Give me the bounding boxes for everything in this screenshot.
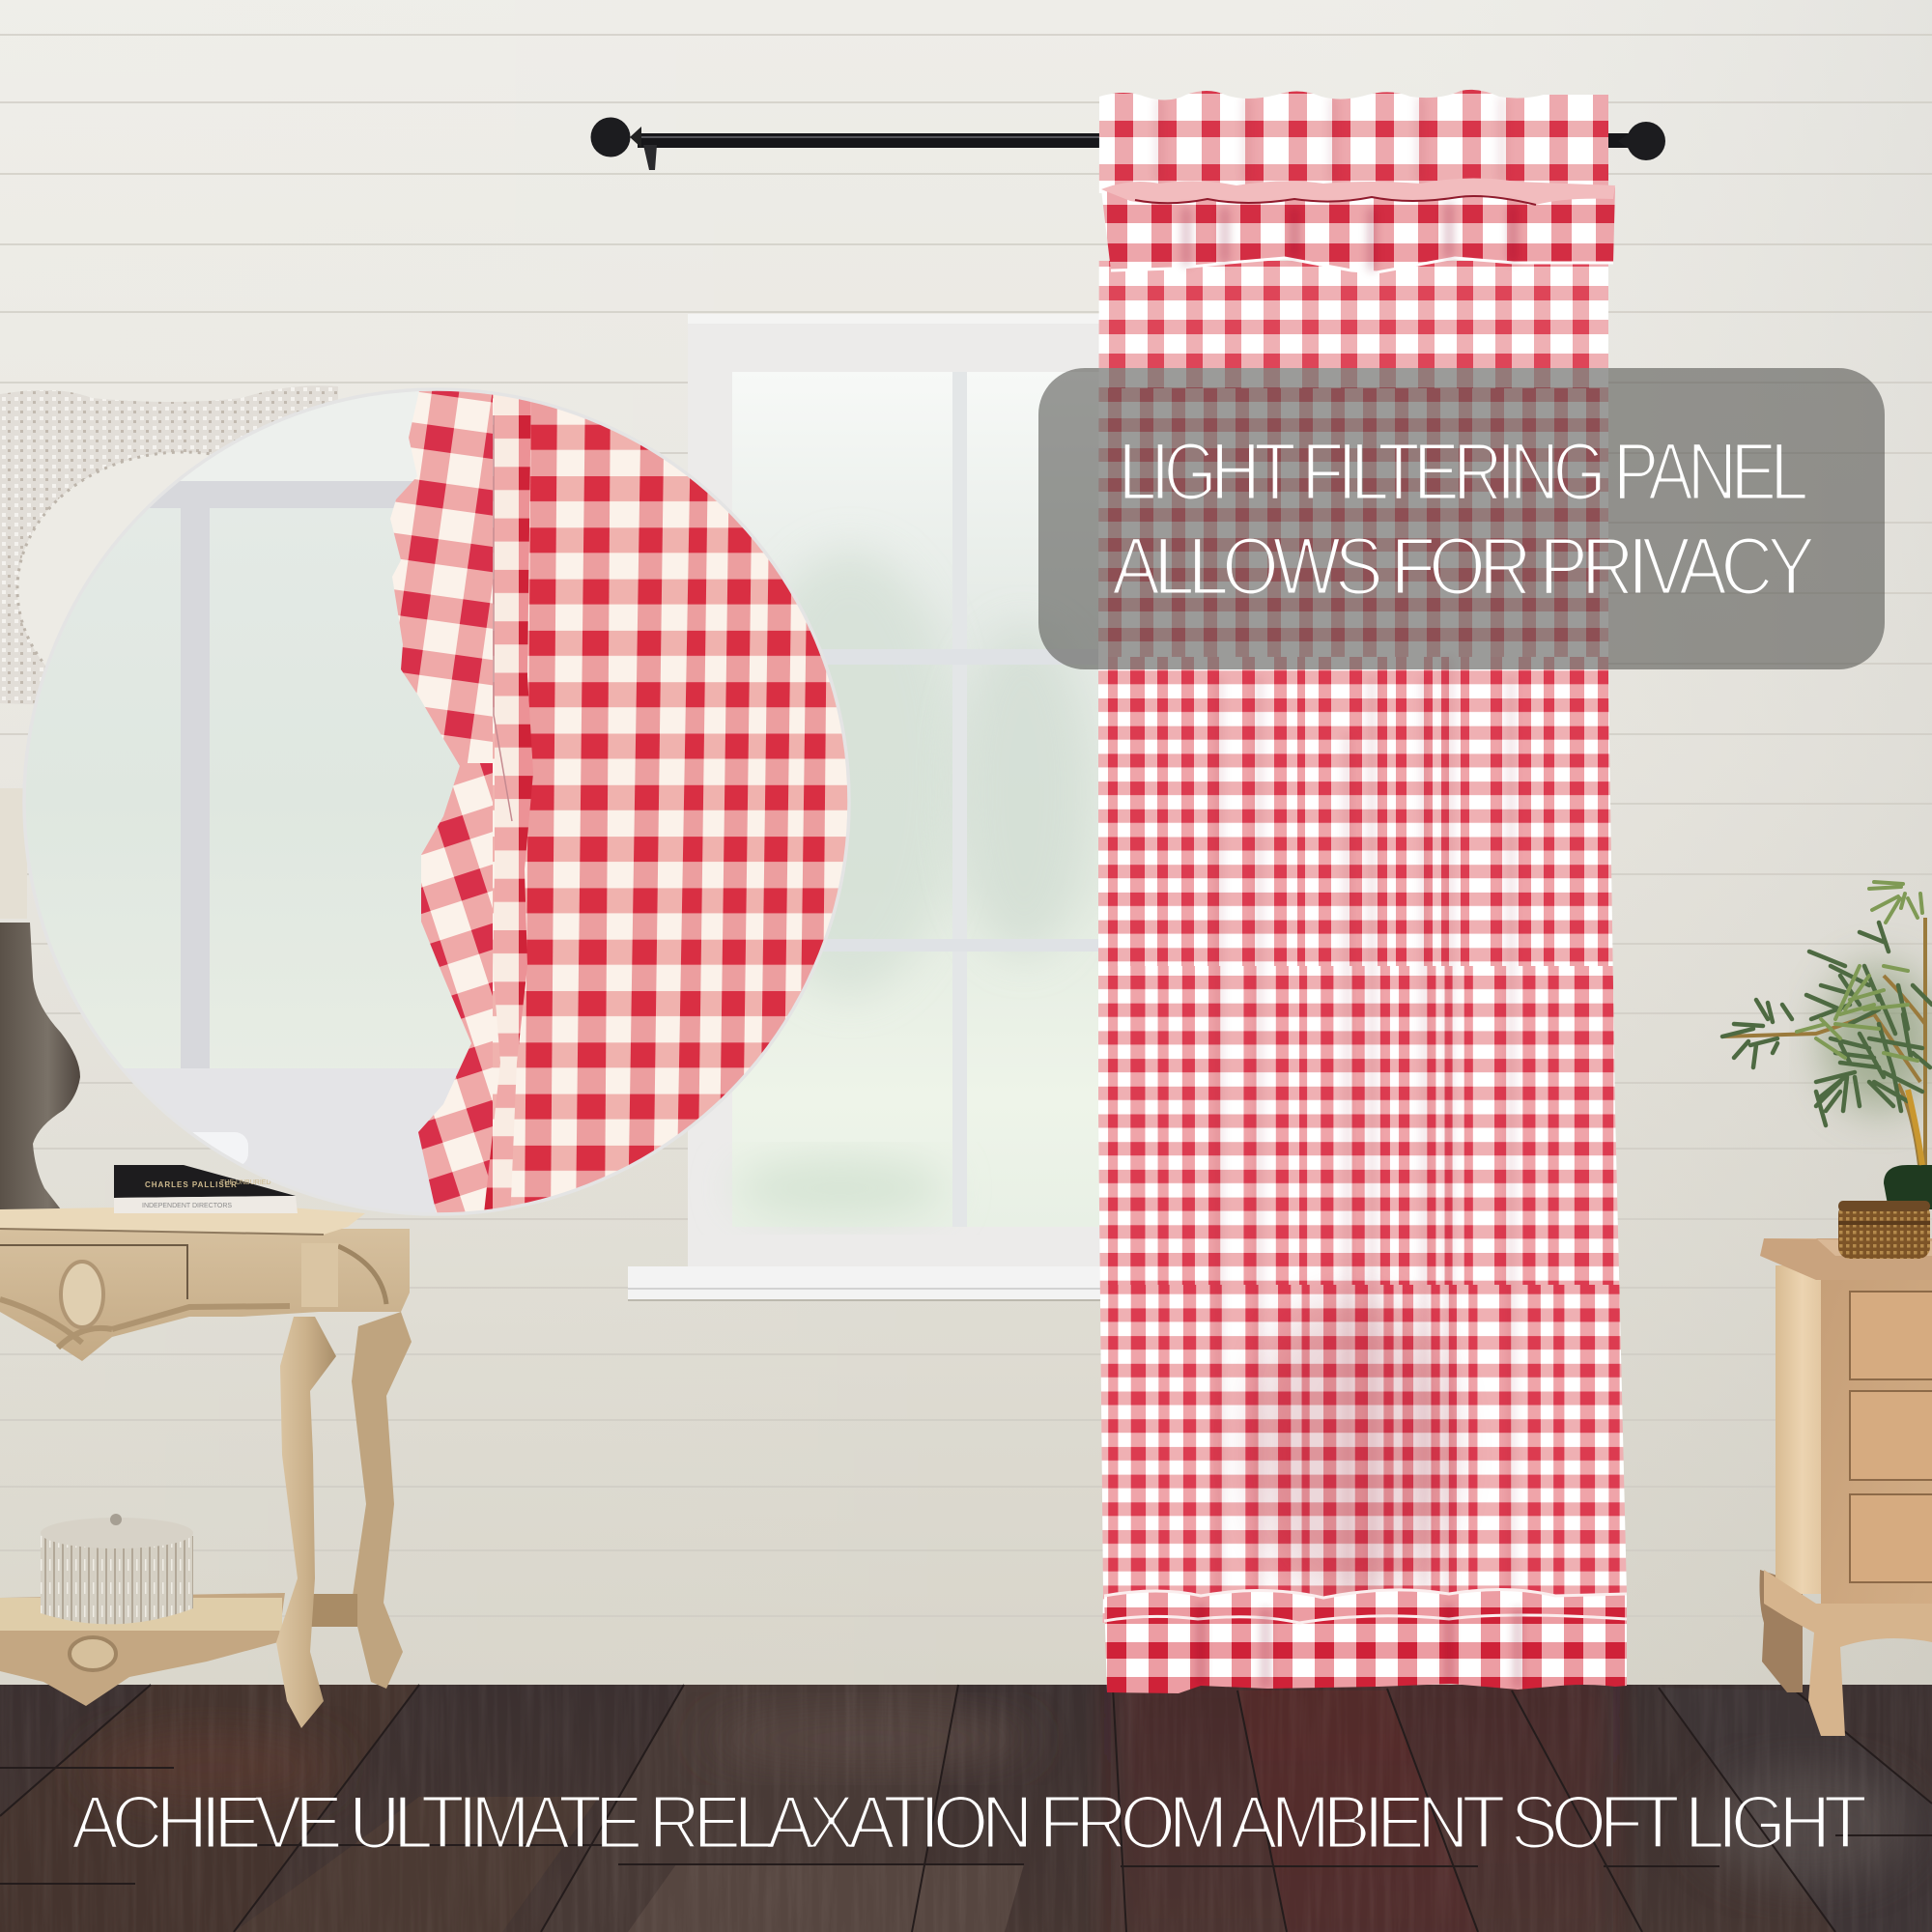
bottom caption: ACHIEVE ULTIMATE RELAXATION FROM AMBIENT SOFT LIGHT: [71, 1779, 1865, 1864]
console table: [0, 1208, 412, 1728]
panel heading line 1: LIGHT FILTERING PANEL: [1119, 426, 1806, 517]
stacked books: INDEPENDENT DIRECTORS: [142, 1203, 232, 1209]
stacked books: [114, 1165, 298, 1213]
gingham curtain: [1092, 87, 1633, 1739]
table back leg: [352, 1312, 412, 1689]
magnified fabric detail circle: [23, 390, 850, 1215]
panel heading line 2: ALLOWS FOR PRIVACY: [1112, 521, 1814, 611]
chest base and front leg: [1764, 1570, 1932, 1736]
table lower shelf: [0, 1593, 285, 1706]
curtain upper body: [1092, 261, 1633, 388]
translucent text panel: [1038, 368, 1885, 669]
lower ruffle band: [1104, 1589, 1627, 1693]
curtain main body: [1092, 97, 1633, 1739]
window: [628, 314, 1103, 1301]
table top: [0, 1208, 365, 1235]
chest side: [1776, 1265, 1824, 1594]
mirror frame ornament: [0, 385, 350, 726]
table front leg: [276, 1317, 336, 1728]
stacked books: CHARLES PALLISER: [145, 1180, 238, 1189]
chest front: [1821, 1273, 1932, 1611]
chest top: [1760, 1238, 1932, 1280]
wicker basket: [1838, 1201, 1930, 1259]
nightstand chest: [1760, 1238, 1932, 1736]
potted bamboo plant: [1722, 882, 1932, 1209]
upper ruffle band: [1101, 187, 1615, 272]
chest drawers: [1850, 1292, 1932, 1582]
inset ruffle seam: [483, 382, 533, 1222]
decorative round box: [41, 1514, 193, 1624]
lamp: [0, 788, 80, 1211]
curtain header: [1092, 87, 1633, 193]
inset curtain fabric: [390, 390, 848, 1213]
wood floor: [0, 1671, 1932, 1932]
carved rosette: [61, 1262, 103, 1327]
shelf rosette: [70, 1637, 116, 1670]
stacked books: THE UNBURIED: [220, 1179, 271, 1186]
curtain rod with finials: [591, 118, 1665, 170]
table apron: [0, 1229, 410, 1361]
chest back leg: [1760, 1570, 1803, 1692]
